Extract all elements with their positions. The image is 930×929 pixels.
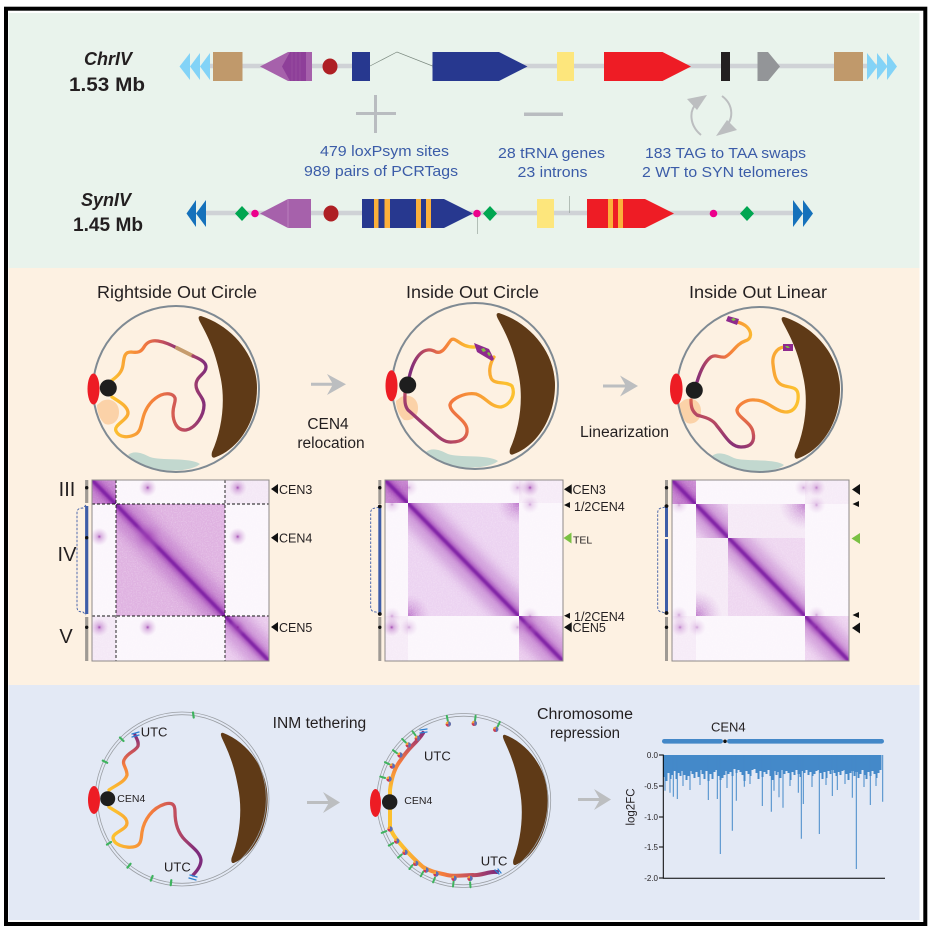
axis labels: log2FC: [626, 788, 638, 826]
arrow: repression: [578, 789, 611, 810]
labels: tethered: UTC: [424, 749, 451, 764]
nucleus: tethered: [370, 714, 551, 888]
chromosome IV block: [408, 503, 519, 616]
label: Chromosome repression: repression: [550, 725, 620, 742]
nucleus: before tethering: [88, 712, 269, 886]
axes: [659, 754, 885, 878]
heading: Inside Out Linear: Inside Out Linear: [689, 282, 827, 302]
text: swaps: [642, 146, 808, 181]
bar chart: log2FC: [659, 754, 885, 878]
CEN labels: map 2: TEL: [573, 534, 592, 546]
label: CEN4: CEN4: [711, 720, 746, 735]
CEN labels: map 1: CEN4: [279, 532, 312, 546]
axis labels: -1.5: [644, 843, 659, 852]
labels: tethered: UTC: [481, 854, 507, 869]
CEN labels: map 1: [271, 483, 312, 635]
text: swaps: 183 TAG to TAA swaps: [645, 146, 806, 162]
chromosome track: [662, 739, 884, 744]
text: deletions: 23 introns: [518, 165, 588, 181]
labels: before tethering: UTC: [164, 860, 191, 875]
label: CEN4 relocation: [297, 416, 365, 452]
Hi-C map: inside out circle: [383, 479, 563, 661]
heading: Rightside Out Circle: Rightside Out Circle: [97, 282, 257, 302]
heading: ChrIV: 1.53 Mb: [69, 75, 145, 96]
chromosome bar: map 1: [77, 480, 88, 661]
axis labels: [626, 751, 659, 883]
axis labels: 0.0: [647, 751, 659, 760]
arrow: CEN4 relocation: [311, 374, 346, 395]
nucleus: rightside out circle: [88, 306, 259, 472]
label: CEN4 relocation: relocation: [297, 435, 365, 452]
chromosome labels: IV: [58, 544, 77, 566]
heading: Inside Out Circle: Inside Out Circle: [406, 282, 539, 302]
heading: SynIV: [73, 190, 143, 236]
CEN labels: map 2: 1/2CEN4: [574, 500, 625, 514]
text: additions: 989 pairs of PCRTags: [304, 164, 458, 180]
text: deletions: [498, 146, 605, 181]
SynIV gene track: [186, 196, 813, 234]
nucleus: inside out circle: [386, 303, 558, 469]
chromosome bar: map 2: [371, 480, 382, 661]
CEN labels: map 1: CEN3: [279, 483, 312, 497]
text: swaps: 2 WT to SYN telomeres: [642, 165, 808, 181]
chromosome IV block: [116, 504, 225, 616]
labels: tethered: [404, 749, 507, 869]
label: CEN4 relocation: CEN4: [307, 416, 349, 433]
CEN markers: map 3: [852, 484, 860, 634]
CEN labels: map 2: [564, 483, 625, 635]
arrow: linearization: [603, 376, 638, 396]
panel: INM tethering: [8, 685, 920, 920]
text: additions: [304, 144, 458, 180]
icon: swap arrows: [687, 95, 737, 136]
labels: tethered: CEN4: [404, 795, 432, 807]
label: Chromosome repression: Chromosome: [537, 706, 633, 723]
chromosome labels: III: [59, 479, 75, 501]
chromosome labels: V: [59, 626, 73, 648]
CEN labels: map 2: CEN5: [572, 621, 606, 635]
axis labels: -2.0: [644, 874, 659, 883]
Hi-C map: rightside out: [90, 479, 269, 661]
chromosome labels: [58, 479, 77, 648]
chromosome bar: map 3: [658, 480, 668, 661]
heading: SynIV: SynIV: [81, 190, 133, 210]
label: Linearization: Linearization: [580, 424, 669, 441]
arrow: tethering: [307, 792, 340, 813]
ChrIV gene track: [180, 52, 897, 81]
labels: before tethering: CEN4: [117, 793, 145, 805]
CEN labels: map 2: CEN3: [572, 483, 606, 497]
labels: before tethering: UTC: [141, 725, 167, 740]
panel: chromosome conformations: [8, 268, 920, 685]
chromosome IV blocks: [696, 504, 728, 538]
text: deletions: 28 tRNA genes: [498, 146, 605, 162]
nucleus: inside out linear: [670, 307, 842, 472]
heading: ChrIV: [69, 49, 145, 96]
heading: ChrIV: ChrIV: [84, 49, 134, 69]
CEN labels: map 2: 1/2CEN4: [574, 610, 625, 624]
panel: chromosome design: [8, 13, 920, 268]
Hi-C map: inside out linear: [670, 478, 849, 661]
icon: plus: [356, 95, 396, 133]
labels: before tethering: [117, 725, 191, 875]
heading: SynIV: 1.45 Mb: [73, 215, 143, 236]
label: INM tethering: INM tethering: [273, 715, 366, 732]
label: Chromosome repression: [537, 706, 633, 742]
axis labels: -0.5: [644, 782, 659, 791]
icon: minus: [524, 113, 563, 116]
text: additions: 479 loxPsym sites: [320, 144, 449, 160]
axis labels: -1.0: [644, 813, 659, 822]
CEN labels: map 1: CEN5: [279, 621, 312, 635]
